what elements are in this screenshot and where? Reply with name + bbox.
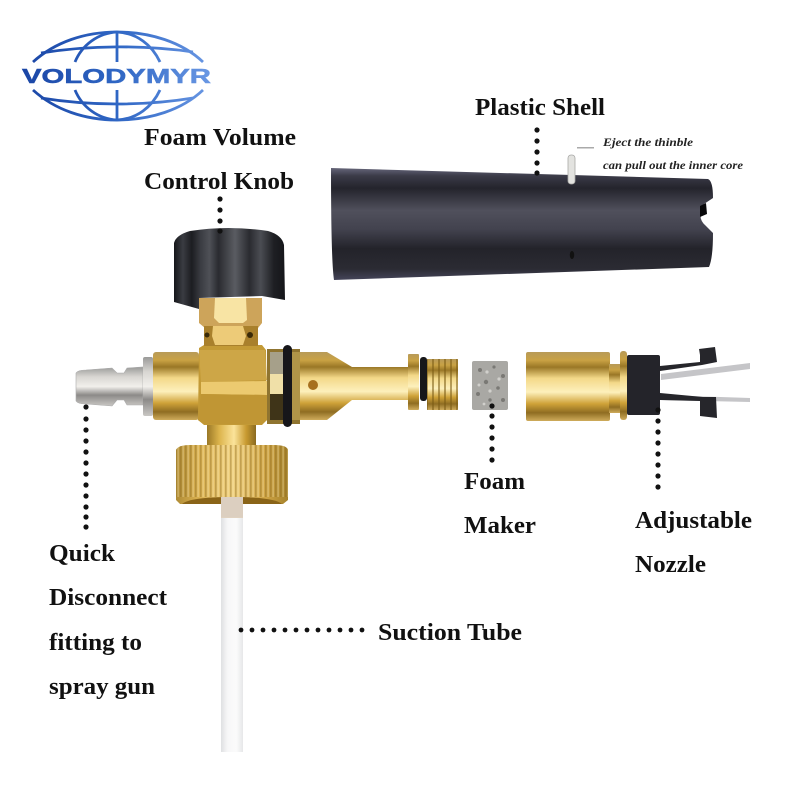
label: foam volume control knob: Control Knob — [144, 169, 294, 195]
hex body — [198, 345, 267, 425]
silver strips — [661, 363, 750, 380]
note: eject the thimble — [577, 135, 744, 172]
black collar — [627, 355, 660, 415]
label: quick disconnect: Disconnect — [49, 585, 167, 611]
label: quick disconnect: fitting to — [49, 630, 142, 656]
tapered barrel — [296, 352, 408, 420]
label: quick disconnect — [49, 541, 167, 700]
label: foam volume control knob — [144, 125, 296, 195]
leader: plastic shell dots — [534, 127, 540, 176]
label: foam maker — [464, 469, 536, 539]
o-ring — [283, 345, 292, 427]
brass cylinder — [526, 352, 610, 421]
note: eject the thimble: can pull out the inner core — [603, 158, 744, 172]
part: brass body — [153, 345, 267, 448]
label: suction tube: Suction Tube — [378, 620, 522, 646]
air hole — [308, 380, 318, 390]
label: quick disconnect: spray gun — [49, 674, 155, 700]
label: adjustable nozzle — [635, 508, 752, 578]
thread — [427, 359, 458, 410]
label: quick disconnect: Quick — [49, 541, 116, 567]
label: plastic shell: Plastic Shell — [475, 95, 605, 121]
logo: Volodymyr globe — [22, 32, 212, 120]
stem below body — [207, 422, 256, 448]
label: foam maker: Foam — [464, 469, 525, 495]
part: hex collars under knob — [199, 298, 262, 346]
left cylinder — [153, 352, 199, 420]
ejector pin — [568, 155, 575, 184]
part: adjustable nozzle — [526, 347, 750, 421]
logo wordmark: VOLODYMYR — [22, 66, 212, 88]
leader: suction tube dots — [239, 628, 364, 632]
label: adjustable nozzle: Nozzle — [635, 552, 706, 578]
label: foam volume control knob: Foam Volume — [144, 125, 296, 151]
part: foam volume control knob — [174, 228, 285, 309]
part: plastic shell — [331, 155, 713, 280]
leader: quick disconnect dots — [83, 404, 89, 530]
label: adjustable nozzle: Adjustable — [635, 508, 752, 534]
part: lance tube — [267, 345, 458, 427]
leader: foam knob dots — [217, 196, 223, 234]
black arms — [660, 347, 717, 371]
part: foam maker — [472, 361, 508, 410]
leader: foam maker dots — [489, 403, 495, 463]
part: knurled nut — [176, 445, 288, 517]
threaded end o-ring — [420, 357, 427, 401]
flange — [408, 354, 419, 410]
leader: nozzle dots — [655, 407, 661, 490]
part: quick disconnect fitting — [76, 357, 153, 416]
note: eject the thimble: Eject the thinble — [602, 135, 694, 149]
label: foam maker: Maker — [464, 513, 536, 539]
part: suction tube — [221, 496, 243, 752]
collar — [267, 349, 300, 424]
